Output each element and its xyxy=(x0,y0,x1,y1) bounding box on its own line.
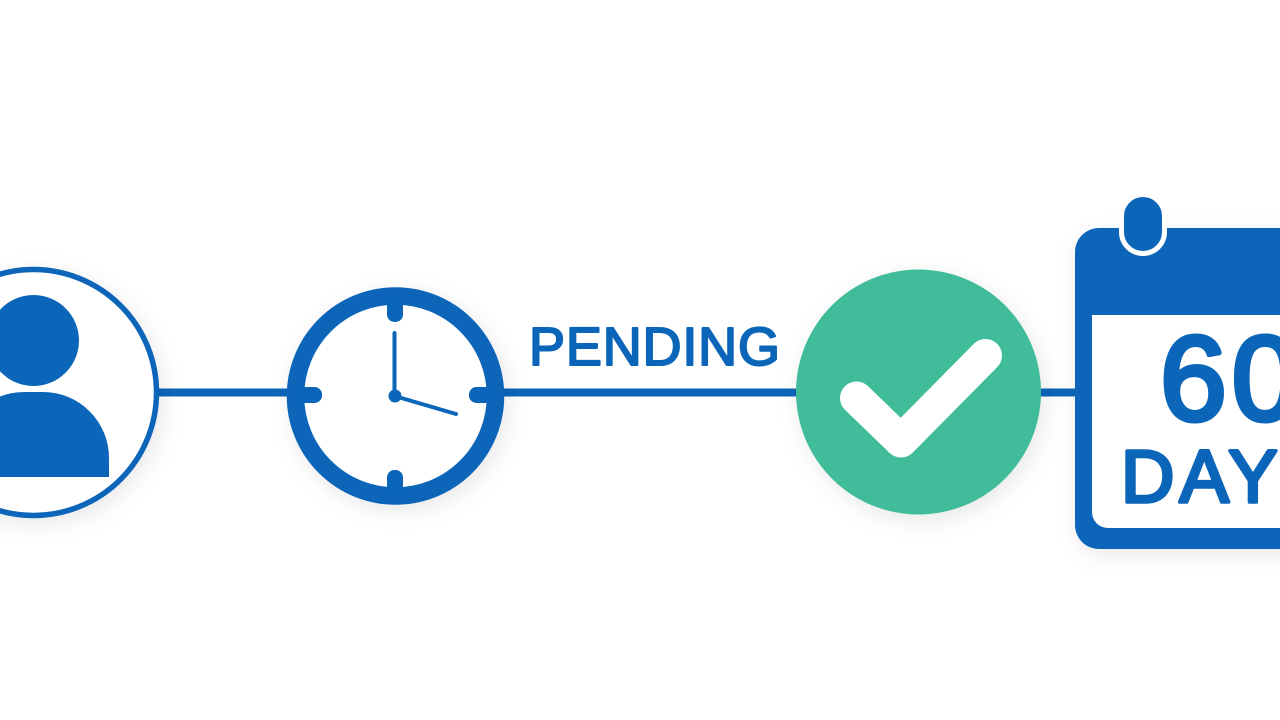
icon: person xyxy=(0,270,156,516)
icon: clock xyxy=(296,296,496,496)
icon: green check xyxy=(796,270,1041,514)
connecting line xyxy=(155,388,1078,396)
label: pending: PENDING xyxy=(529,317,780,377)
icon: calendar 60 days xyxy=(1075,194,1280,549)
